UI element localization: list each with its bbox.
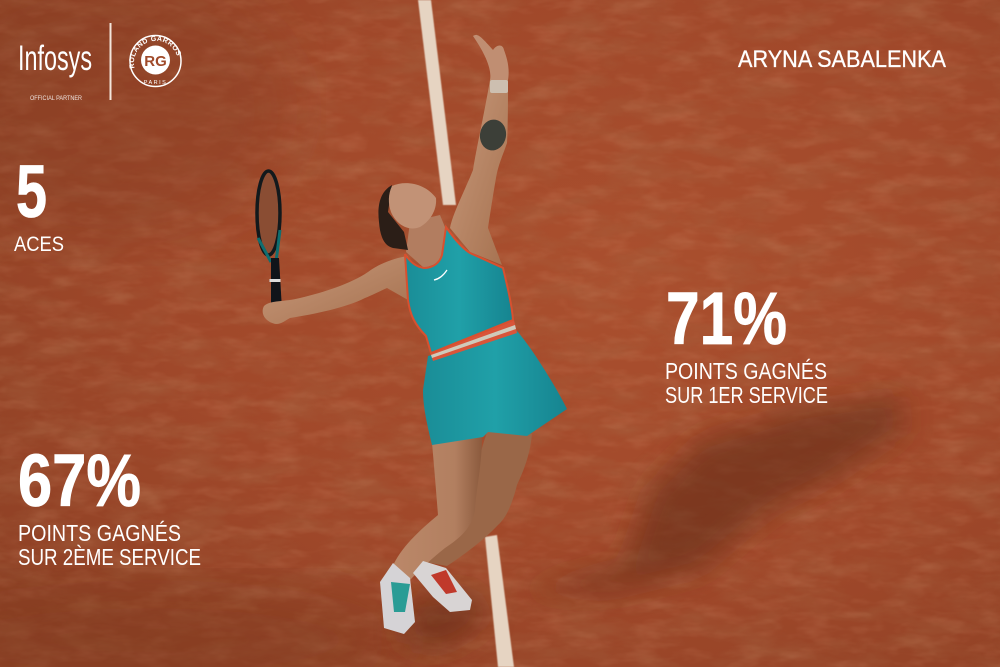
player name: ARYNA SABALENKA	[738, 46, 946, 73]
arm tattoo	[478, 117, 508, 153]
Roland Garros badge: PARIS	[144, 80, 167, 86]
skirt	[423, 330, 567, 445]
hair	[378, 185, 408, 250]
hand	[473, 35, 509, 80]
white court line	[418, 0, 514, 667]
player	[257, 35, 567, 634]
stat: first serve points: SUR 1ER SERVICE	[665, 382, 828, 408]
stat: second serve points: 67%	[18, 439, 141, 522]
racket	[257, 171, 282, 310]
bracelet	[490, 80, 508, 93]
Roland Garros badge	[129, 34, 182, 88]
right leg	[425, 430, 532, 566]
stat: second serve points: POINTS GAGNÉS	[18, 520, 181, 546]
stat: first serve points: 71%	[666, 277, 787, 360]
left shoe	[380, 563, 415, 634]
stat: first serve points: POINTS GAGNÉS	[665, 358, 827, 384]
stat: aces: 5	[16, 150, 47, 233]
stat: second serve points: SUR 2ÈME SERVICE	[18, 544, 201, 570]
left arm	[263, 256, 408, 324]
face	[389, 183, 436, 229]
left leg	[392, 436, 482, 580]
logo swoosh	[434, 270, 447, 280]
Roland Garros badge: RG	[144, 53, 167, 70]
Roland Garros badge: ROLAND GARROS	[129, 36, 181, 68]
stat: aces	[14, 150, 64, 256]
divider	[110, 23, 112, 100]
Infosys wordmark: Infosys	[18, 39, 92, 78]
right shoe	[413, 561, 472, 612]
official partner caption: OFFICIAL PARTNER	[30, 95, 82, 102]
player shadow on the court	[400, 395, 905, 650]
neck and chest	[406, 215, 447, 268]
partner logos	[18, 23, 182, 102]
stat: second serve points	[18, 439, 201, 570]
stat: aces: ACES	[14, 233, 64, 256]
stat: first serve points	[665, 277, 828, 408]
dress top	[405, 227, 513, 353]
raised arm	[450, 80, 508, 265]
waist band	[430, 320, 517, 361]
